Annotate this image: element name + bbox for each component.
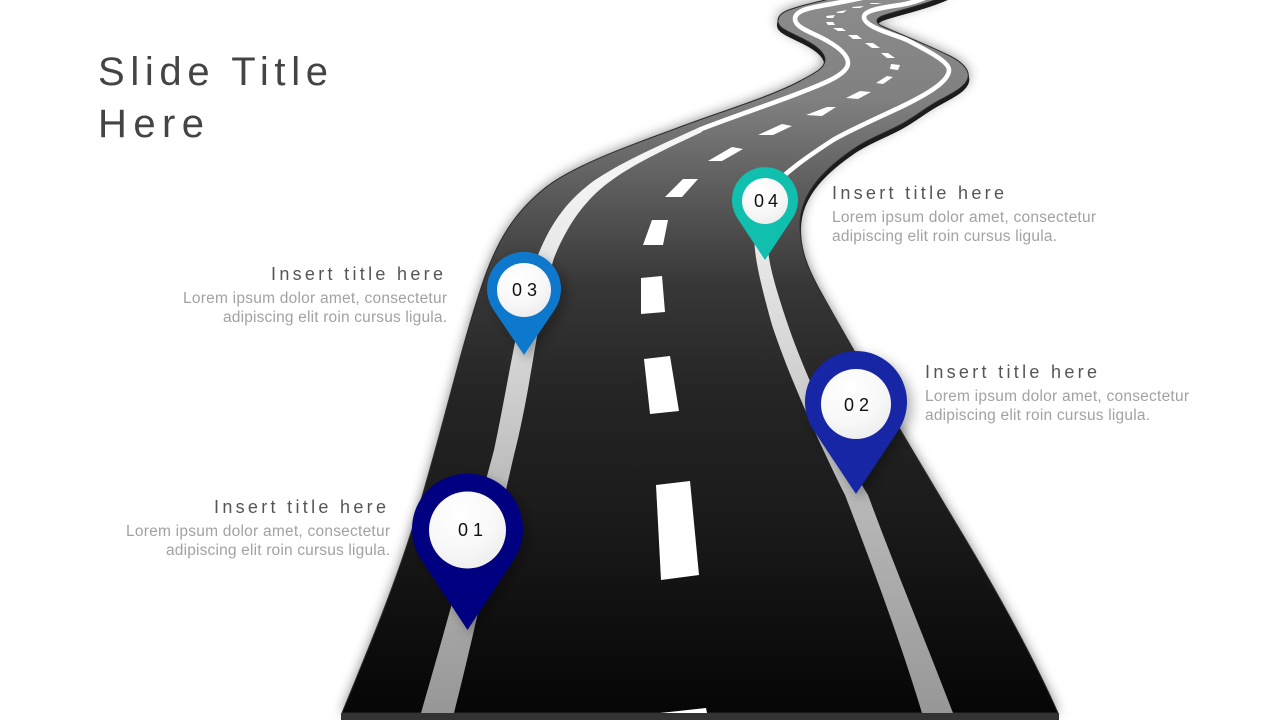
callout 01: Insert title here bbox=[214, 497, 386, 517]
callout 02: adipiscing elit roin cursus ligula. bbox=[925, 407, 1150, 424]
callout 03 bbox=[183, 264, 447, 326]
centre dashed line bbox=[641, 3, 900, 713]
left lane line bbox=[421, 0, 880, 713]
title: Here bbox=[98, 102, 204, 146]
pin 02 bbox=[805, 351, 907, 494]
pin 01 bbox=[412, 474, 523, 630]
pin 02: 02 bbox=[844, 395, 869, 415]
road bbox=[341, 0, 1059, 720]
callout 02 bbox=[925, 362, 1189, 424]
callout 03: Insert title here bbox=[271, 264, 443, 284]
right lane line bbox=[754, 0, 953, 713]
callout 01: Lorem ipsum dolor amet, consectetur bbox=[126, 523, 390, 540]
road front edge bbox=[341, 713, 1059, 720]
callout 04: Lorem ipsum dolor amet, consectetur bbox=[832, 209, 1096, 226]
callout 01 bbox=[126, 497, 390, 559]
pin 03 bbox=[487, 252, 561, 355]
road side edge bbox=[700, 0, 968, 291]
callout 04: Insert title here bbox=[832, 183, 1004, 203]
pin 03: 03 bbox=[512, 280, 537, 300]
callout 04: adipiscing elit roin cursus ligula. bbox=[832, 228, 1057, 245]
title bbox=[98, 50, 328, 146]
callout 03: Lorem ipsum dolor amet, consectetur bbox=[183, 290, 447, 307]
pin 01: 01 bbox=[458, 520, 483, 540]
pin 04 bbox=[732, 167, 798, 260]
callout 01: adipiscing elit roin cursus ligula. bbox=[166, 542, 390, 559]
road surface bbox=[342, 0, 1058, 713]
callout 03: adipiscing elit roin cursus ligula. bbox=[223, 309, 447, 326]
callout 02: Insert title here bbox=[925, 362, 1097, 382]
callout 04 bbox=[832, 183, 1096, 245]
road soft shadow bbox=[342, 0, 1058, 713]
title: Slide Title bbox=[98, 50, 328, 94]
pin 04: 04 bbox=[754, 191, 778, 211]
callout 02: Lorem ipsum dolor amet, consectetur bbox=[925, 388, 1189, 405]
